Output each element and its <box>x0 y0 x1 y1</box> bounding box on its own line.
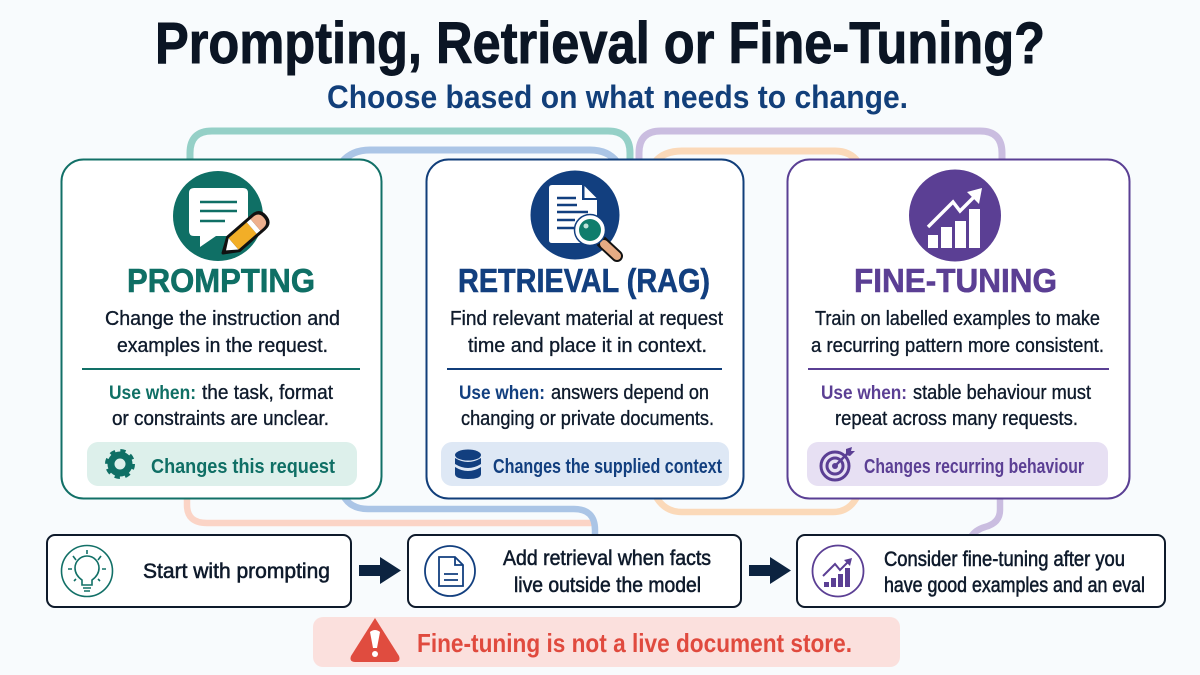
callout: warning <box>313 617 900 667</box>
icon: document <box>425 546 475 596</box>
step: start with prompting <box>47 535 351 607</box>
description: prompting: Change the instruction and <box>105 308 340 330</box>
subtitle: Choose based on what needs to change. <box>327 79 908 115</box>
icon: document with magnifier <box>530 170 620 260</box>
step: add retrieval: Add retrieval when facts <box>503 547 711 570</box>
icon: database <box>455 450 481 479</box>
heading: fine-tuning: FINE-TUNING <box>854 262 1057 299</box>
icon: warning triangle <box>350 618 400 662</box>
step: start with prompting: Start with prompting <box>143 560 330 583</box>
heading: retrieval: RETRIEVAL (RAG) <box>458 262 710 299</box>
use when: retrieval: answers depend on <box>551 382 709 404</box>
description: fine-tuning <box>811 308 1104 357</box>
description: fine-tuning: a recurring pattern more consistent. <box>811 335 1104 357</box>
use when: prompting: the task, format <box>202 382 333 404</box>
use when: prompting: Use when: <box>109 382 196 404</box>
panel: fine-tuning <box>788 160 1130 498</box>
use when: fine-tuning <box>821 382 1091 430</box>
badge: changes this request <box>87 442 357 486</box>
panel: retrieval <box>426 160 744 498</box>
use when: retrieval: changing or private documents. <box>461 408 714 430</box>
step: consider fine-tuning: Consider fine-tuning after you <box>884 548 1125 571</box>
icon: gear <box>107 451 133 477</box>
use when: fine-tuning: repeat across many requests. <box>835 408 1078 430</box>
description: retrieval: Find relevant material at request <box>450 308 723 330</box>
step: add retrieval: live outside the model <box>514 574 701 597</box>
use when: retrieval: Use when: <box>459 382 545 404</box>
badge: changes recurring behaviour <box>807 442 1108 486</box>
description: retrieval <box>450 308 723 357</box>
use when: prompting <box>109 382 333 430</box>
badge: changes this request: Changes this request <box>151 456 335 478</box>
step: add retrieval <box>408 535 741 607</box>
description: prompting <box>105 308 340 357</box>
description: prompting: examples in the request. <box>117 335 328 357</box>
title: Prompting, Retrieval or Fine-Tuning? <box>155 11 1045 76</box>
icon: speech bubble with pencil <box>173 171 271 261</box>
step: consider fine-tuning: have good examples and an eval <box>884 574 1145 597</box>
arrow: step 2 to step 3 <box>749 557 791 584</box>
description: retrieval: time and place it in context. <box>468 335 707 357</box>
badge: changes the supplied context: Changes the supplied context <box>493 456 722 478</box>
badge: changes recurring behaviour: Changes recurring behaviour <box>864 456 1084 478</box>
callout: warning: Fine-tuning is not a live document store. <box>417 628 852 658</box>
panel: prompting <box>62 160 382 498</box>
description: fine-tuning: Train on labelled examples to make <box>815 308 1100 330</box>
connectors: bottom links between cards and steps <box>187 495 1000 538</box>
icon: light bulb <box>62 546 112 596</box>
use when: fine-tuning: Use when: <box>821 382 907 404</box>
icon: target <box>821 447 855 480</box>
step: consider fine-tuning <box>797 535 1165 607</box>
use when: retrieval <box>459 382 714 430</box>
connectors: top links between cards <box>190 131 1002 165</box>
badge: changes the supplied context <box>441 442 729 486</box>
icon: rising chart <box>909 170 1001 262</box>
use when: fine-tuning: stable behaviour must <box>913 382 1091 404</box>
arrow: step 1 to step 2 <box>359 557 401 584</box>
heading: prompting: PROMPTING <box>127 262 315 299</box>
icon: small chart <box>812 546 864 596</box>
use when: prompting: or constraints are unclear. <box>112 408 329 430</box>
